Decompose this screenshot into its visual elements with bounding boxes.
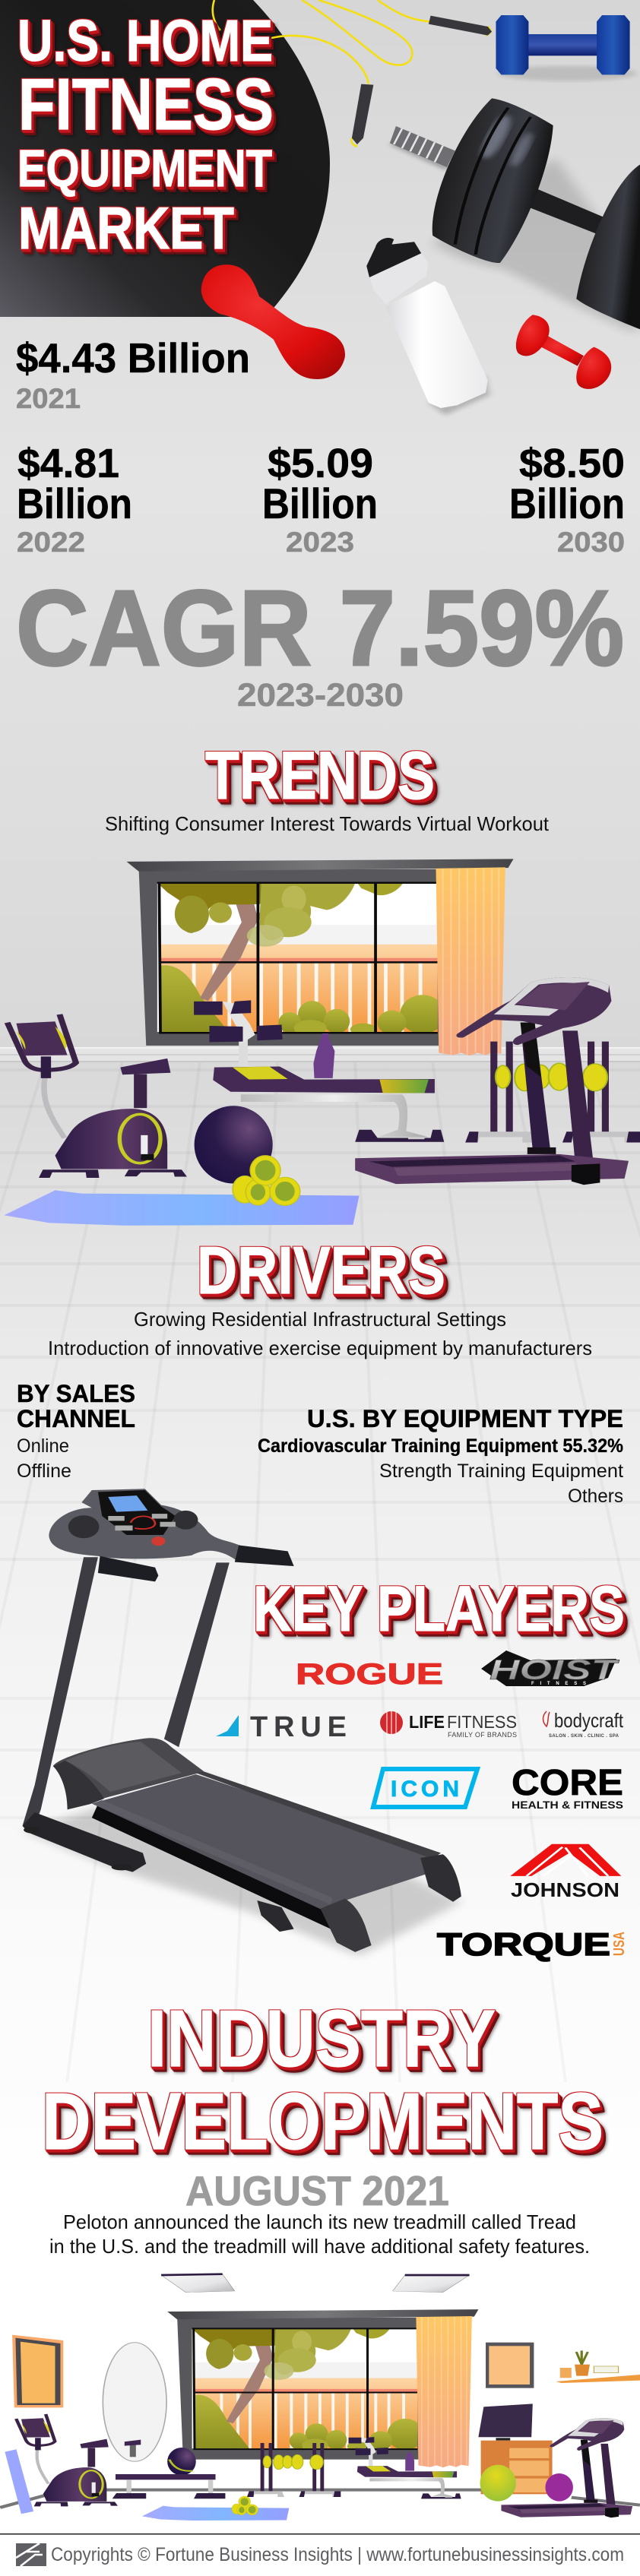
icon: large red dumbbell xyxy=(201,264,345,379)
icon: water bottle xyxy=(366,238,490,416)
window xyxy=(167,2309,478,2467)
stat 2030: $8.50 xyxy=(519,441,625,486)
stat 2021 xyxy=(16,334,250,414)
by sales channel: Offline xyxy=(17,1460,71,1482)
ceiling lights xyxy=(161,2274,470,2293)
water bottle xyxy=(405,2452,414,2471)
treadmill xyxy=(501,2418,632,2517)
logo: Johnson: JOHNSON xyxy=(511,1878,619,1901)
footer xyxy=(0,2533,640,2576)
stat 2022: $4.81 xyxy=(17,441,119,486)
weight bench xyxy=(194,1000,444,1142)
logo: Life Fitness: LIFE xyxy=(409,1712,445,1732)
trends text: Shifting Consumer Interest Towards Virtual Workout xyxy=(105,812,550,835)
stat 2030: Billion xyxy=(509,479,625,527)
by equipment type: Strength Training Equipment xyxy=(379,1460,623,1482)
heading: drivers: DRIVERS xyxy=(197,1233,445,1308)
mirror xyxy=(103,2343,166,2461)
logo: Core: CORE xyxy=(512,1763,623,1803)
logo: Torque USA: TORQUE xyxy=(437,1926,610,1962)
heading: trends: TRENDS xyxy=(205,737,435,813)
weight rack xyxy=(465,1042,640,1143)
floor edge xyxy=(0,2490,640,2508)
floor xyxy=(0,1062,640,2538)
exercise bike xyxy=(8,1014,187,1178)
weight bench xyxy=(349,2437,461,2498)
logo: Life Fitness xyxy=(380,1711,517,1739)
heading: industry developments xyxy=(42,1994,604,2166)
water bottle xyxy=(313,1033,334,1078)
window xyxy=(126,859,514,1055)
icon: blue dumbbell xyxy=(496,15,637,81)
stat 2023: 2023 xyxy=(286,527,354,558)
background wall xyxy=(0,0,640,1064)
title: MARKET xyxy=(18,195,234,261)
drivers text: Introduction of innovative exercise equipment by manufacturers xyxy=(48,1337,592,1359)
ball xyxy=(167,2448,196,2476)
treadmill xyxy=(355,977,629,1185)
illustration: full home gym xyxy=(0,2274,640,2521)
exercise ball xyxy=(195,1106,273,1183)
fitness balls xyxy=(480,2465,573,2502)
logo: Icon: ICON xyxy=(391,1777,459,1802)
logo: Life Fitness: FITNESS xyxy=(447,1712,517,1732)
by equipment type: U.S. BY EQUIPMENT TYPE xyxy=(307,1405,623,1432)
exercise bike xyxy=(16,2414,118,2506)
bench left xyxy=(112,2474,225,2498)
wall rolled mat xyxy=(5,2449,33,2514)
logo: Life Fitness: FAMILY OF BRANDS xyxy=(448,1731,517,1739)
by sales channel xyxy=(17,1380,135,1482)
icon: small red dumbbell xyxy=(516,315,611,389)
logo: Hoist: FITNESS xyxy=(531,1682,586,1686)
logo: True: TRUE xyxy=(250,1711,347,1743)
illustration: home gym xyxy=(4,859,640,1226)
by equipment type xyxy=(258,1405,623,1507)
stat 2022 xyxy=(17,441,132,558)
stat 2023: Billion xyxy=(262,479,378,527)
logo: Hoist: HOIST xyxy=(490,1654,620,1685)
stat 2023: $5.09 xyxy=(268,441,373,486)
by equipment type: Others xyxy=(568,1486,623,1507)
yoga mat xyxy=(4,1190,360,1226)
logo: Core: HEALTH & FITNESS xyxy=(512,1799,623,1811)
picture right xyxy=(486,2343,534,2388)
dumbbells xyxy=(233,1156,300,1205)
logo: Torque USA: USA xyxy=(611,1932,628,1956)
treadmill deck xyxy=(23,1557,461,1956)
logo: Rogue: ROGUE xyxy=(296,1658,443,1691)
dark title backdrop xyxy=(0,0,330,317)
dumbbells xyxy=(232,2496,258,2515)
development text: in the U.S. and the treadmill will have additional safety features. xyxy=(49,2235,590,2258)
stat 2021: $4.43 Billion xyxy=(16,334,250,381)
logo: Bodycraft: bodycraft xyxy=(554,1709,624,1732)
title: FITNESS xyxy=(18,64,274,145)
stat 2021: 2021 xyxy=(16,383,81,414)
logo: Bodycraft xyxy=(543,1709,624,1739)
treadmill console xyxy=(49,1489,294,1581)
stat 2022: Billion xyxy=(17,479,132,527)
title xyxy=(17,8,274,261)
logo: Hoist xyxy=(481,1650,620,1686)
title: U.S. HOME xyxy=(17,8,273,74)
baseboard xyxy=(0,1047,640,1062)
shelf xyxy=(556,2350,640,2383)
stat 2022: 2022 xyxy=(17,527,85,558)
CAGR: 2023-2030 xyxy=(237,677,404,714)
stat 2030: 2030 xyxy=(557,527,625,558)
yoga mat xyxy=(142,2506,289,2521)
title: EQUIPMENT xyxy=(17,139,272,198)
by sales channel: Online xyxy=(17,1435,69,1457)
drivers text xyxy=(48,1308,592,1359)
large treadmill xyxy=(23,1489,461,1956)
stat 2023 xyxy=(262,441,378,558)
picture left xyxy=(12,2335,63,2407)
logo: Icon xyxy=(373,1769,477,1807)
logo: Bodycraft: SALON . SKIN . CLINIC . SPA xyxy=(549,1734,619,1739)
development text: Peloton announced the launch its new treadmill called Tread xyxy=(63,2210,576,2233)
stat 2030 xyxy=(509,441,625,558)
development text xyxy=(49,2210,590,2258)
by sales channel: BY SALES xyxy=(17,1380,135,1407)
icon: jump rope xyxy=(213,0,492,147)
icon: black barbell dumbbell xyxy=(390,98,640,334)
footer logo xyxy=(16,2543,46,2566)
by sales channel: CHANNEL xyxy=(17,1405,135,1432)
drivers text: Growing Residential Infrastructural Settings xyxy=(134,1308,506,1331)
heading: industry developments: INDUSTRY xyxy=(147,1994,496,2084)
weight rack xyxy=(247,2443,341,2497)
date: August 2021: AUGUST 2021 xyxy=(185,2167,449,2214)
monitor and dresser xyxy=(478,2404,553,2494)
by equipment type: Cardiovascular Training Equipment 55.32% xyxy=(258,1435,623,1457)
logo: Johnson xyxy=(510,1844,621,1901)
